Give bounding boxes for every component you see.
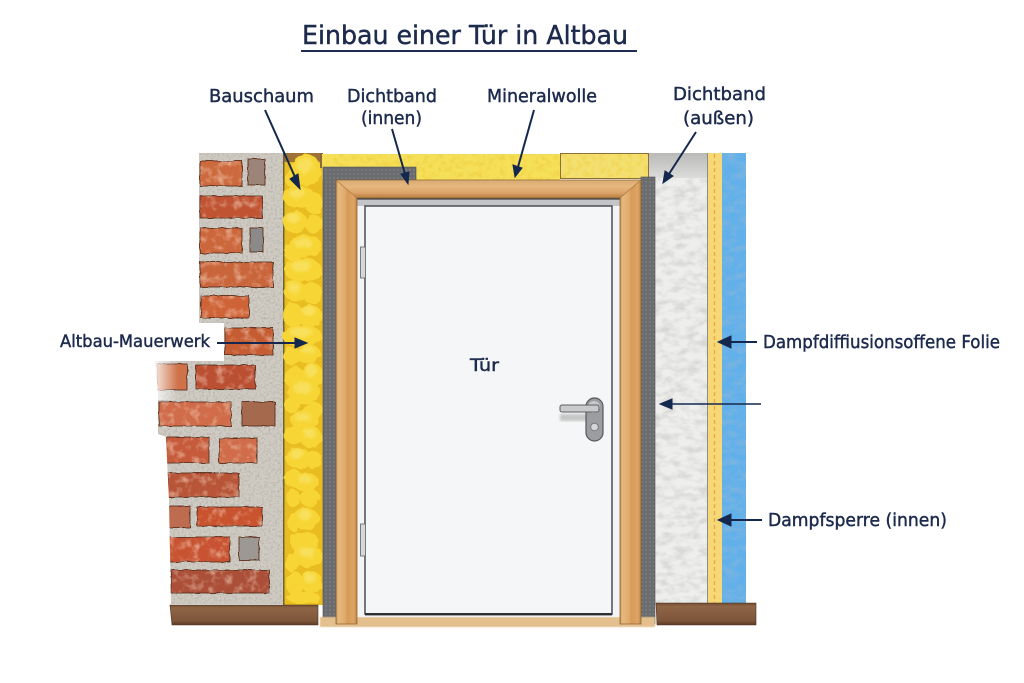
label: Altbau-Mauerwerk: Altbau-Mauerwerk — [60, 332, 210, 352]
label: Dichtband aussen: (außen) — [683, 108, 754, 129]
arrow: Tuer — [660, 399, 761, 409]
door — [360, 206, 612, 615]
label: Dichtband innen: (innen) — [361, 108, 422, 129]
label: Dampfsperre innen: Dampfsperre (innen) — [768, 511, 947, 531]
arrow: Dichtband aussen — [663, 132, 696, 183]
bricks — [157, 159, 275, 593]
hinge bottom — [360, 524, 366, 556]
panel: exterior insulation and foils — [649, 153, 746, 604]
arrow: Folie — [718, 336, 757, 348]
arrow: Dichtband innen — [392, 129, 409, 184]
arrow: Dampfsperre — [718, 514, 762, 526]
label: Mineralwolle: Mineralwolle — [487, 86, 597, 107]
hinge top — [360, 247, 366, 278]
panel: mineral wool top — [320, 153, 650, 180]
sill right — [656, 603, 756, 625]
label: Dichtband innen — [347, 86, 437, 129]
panel: sealing tape outside — [641, 177, 655, 624]
label: Dichtband innen: Dichtband — [347, 86, 437, 107]
label: Dichtband aussen: Dichtband — [673, 84, 766, 105]
arrow: Mineralwolle — [513, 110, 534, 177]
arrow: Bauschaum — [265, 110, 300, 189]
arrow: Altbau-Mauerwerk — [217, 338, 307, 348]
panel: old brick masonry wall — [150, 150, 286, 606]
panel: sealing tape inside — [323, 167, 416, 624]
title: Einbau einer Tür in Altbau — [302, 21, 628, 51]
door frame — [336, 180, 641, 624]
vapour barrier blue — [722, 153, 746, 604]
door label: Tür — [469, 356, 499, 376]
vapour permeable foil — [708, 153, 722, 604]
door handle — [560, 398, 603, 441]
label: Bauschaum: Bauschaum — [209, 86, 314, 107]
sill left — [170, 605, 318, 625]
panel: expanding foam — [282, 153, 323, 605]
floor threshold — [320, 617, 655, 627]
label: Dampfdiffiusionsoffene Folie: Dampfdiffiusionsoffene Folie — [763, 333, 1000, 353]
label: Dichtband aussen — [673, 84, 766, 129]
